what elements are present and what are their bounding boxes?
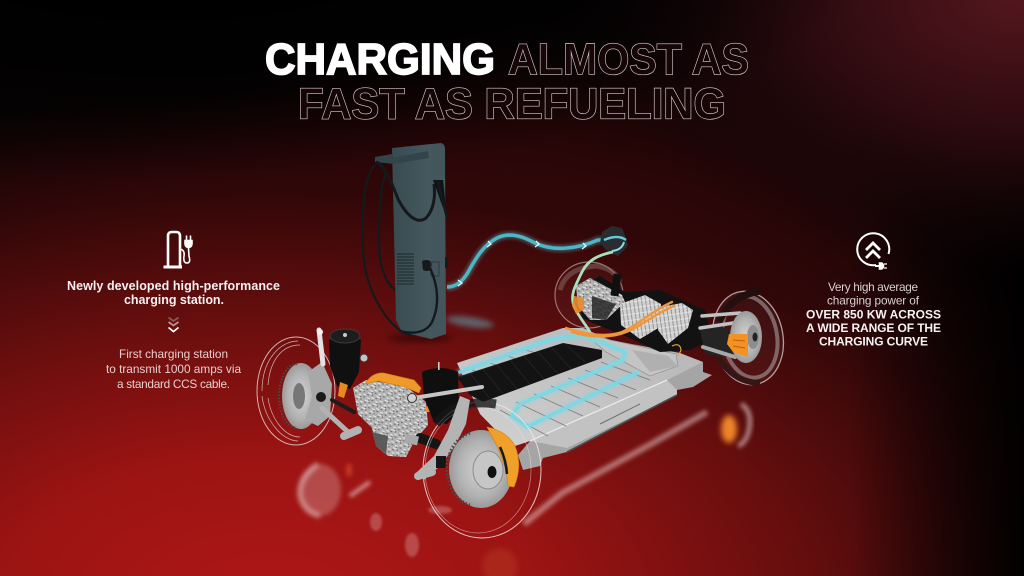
platform: black cell block — [457, 343, 602, 402]
icon: circular plug with up chevrons — [857, 233, 889, 270]
station: top arm — [375, 151, 429, 164]
tyre: rear left — [555, 262, 623, 328]
cable: cyan core — [447, 235, 617, 287]
front right: brake disc — [449, 430, 513, 508]
icon: triple chevron down — [168, 318, 178, 332]
right bold statement — [806, 308, 941, 348]
cable: pale green to orange path — [572, 252, 613, 332]
right bold statement: CHARGING CURVE — [819, 334, 928, 348]
rear: orange caliper — [727, 334, 748, 357]
battery platform — [457, 328, 712, 470]
station: side face — [431, 143, 446, 339]
connector: plug — [600, 226, 628, 256]
front right: ghost tyre — [423, 402, 541, 538]
platform: top surface — [457, 328, 703, 447]
right bold statement: A WIDE RANGE OF THE — [806, 321, 941, 335]
rear: motor one — [620, 295, 661, 339]
right body text — [827, 280, 920, 308]
front right: upper arm — [414, 387, 482, 398]
reflection: rear wheel — [738, 404, 750, 446]
rear: small orange wire — [672, 345, 681, 356]
front right: orange caliper — [487, 427, 519, 487]
station: front hose — [400, 268, 437, 333]
platform: edge highlight — [530, 380, 667, 441]
right body text: charging power of — [827, 294, 920, 308]
front right: hub knuckle — [417, 396, 470, 480]
front left: air spring — [329, 333, 361, 389]
rear: brake disc — [730, 311, 762, 363]
station: shadow — [388, 334, 452, 342]
station: upper hose loop — [376, 162, 435, 220]
front axle assembly — [279, 329, 541, 538]
front right: drive shaft — [420, 438, 436, 444]
left body text: to transmit 1000 amps via — [106, 362, 241, 376]
title — [265, 35, 749, 128]
front left: control arms — [322, 400, 358, 436]
charging station — [363, 143, 452, 342]
platform: panel seams — [472, 350, 650, 436]
rear: suspension arms — [700, 326, 742, 358]
rear axle assembly — [576, 274, 762, 363]
platform: side wall — [518, 362, 712, 470]
station: rear hose — [363, 164, 438, 335]
left heading — [67, 279, 280, 307]
front motor: right orange connector — [425, 402, 434, 412]
right body text: Very high average — [828, 280, 918, 294]
tyre: front left — [257, 337, 335, 445]
left body text: First charging station — [119, 347, 228, 361]
front left: brake disc — [282, 363, 320, 429]
reflection: cyan glow of cable — [446, 314, 494, 330]
reflection: platform edge streak — [524, 412, 707, 524]
rear: shock absorber — [611, 274, 621, 296]
reflection: front left wheel — [299, 463, 370, 516]
rear: gearbox — [576, 278, 625, 320]
station: holster slot — [433, 180, 447, 218]
reflection: rear caliper orange glow — [721, 415, 737, 443]
cable: flow arrows — [458, 241, 586, 286]
cable: orange rear harness — [566, 302, 674, 336]
left body text: a standard CCS cable. — [117, 377, 230, 391]
platform: cyan cooling channels — [460, 336, 637, 427]
icon: charging station with plug — [164, 232, 192, 267]
tyre: rear right — [705, 286, 791, 390]
cable: cyan glow — [447, 235, 617, 287]
cable: orange junction — [572, 296, 584, 314]
front left: knuckle — [305, 362, 332, 426]
station: front face — [392, 144, 431, 339]
left heading: Newly developed high-performance — [67, 279, 280, 293]
right bold statement: OVER 850 KW ACROSS — [806, 308, 941, 322]
station: second hose — [379, 172, 396, 290]
front right: air spring — [422, 368, 459, 424]
reflection: lower smears — [370, 506, 452, 557]
left body text — [106, 347, 241, 391]
station: socket — [422, 260, 432, 271]
title: outlined words line one: ALMOST AS — [508, 35, 749, 84]
title: solid word: CHARGING — [265, 35, 495, 84]
title: outlined words line two: FAST AS REFUELING — [298, 79, 726, 128]
rear: dark frame — [577, 276, 712, 352]
left heading: charging station. — [124, 293, 224, 307]
floor reflections — [299, 314, 750, 576]
front left: strut upper — [319, 330, 323, 364]
platform: rear module — [583, 332, 678, 376]
rear: motor two — [658, 303, 693, 344]
charge connector and cable — [447, 226, 674, 336]
right information block — [806, 233, 941, 348]
station: vent grille — [397, 254, 414, 284]
front motor: housing — [353, 380, 428, 457]
chassis ghost tyres rear — [257, 262, 791, 445]
reflection: front caliper orange — [482, 548, 518, 576]
front motor: orange top cover — [365, 373, 421, 393]
left information block — [67, 232, 280, 391]
